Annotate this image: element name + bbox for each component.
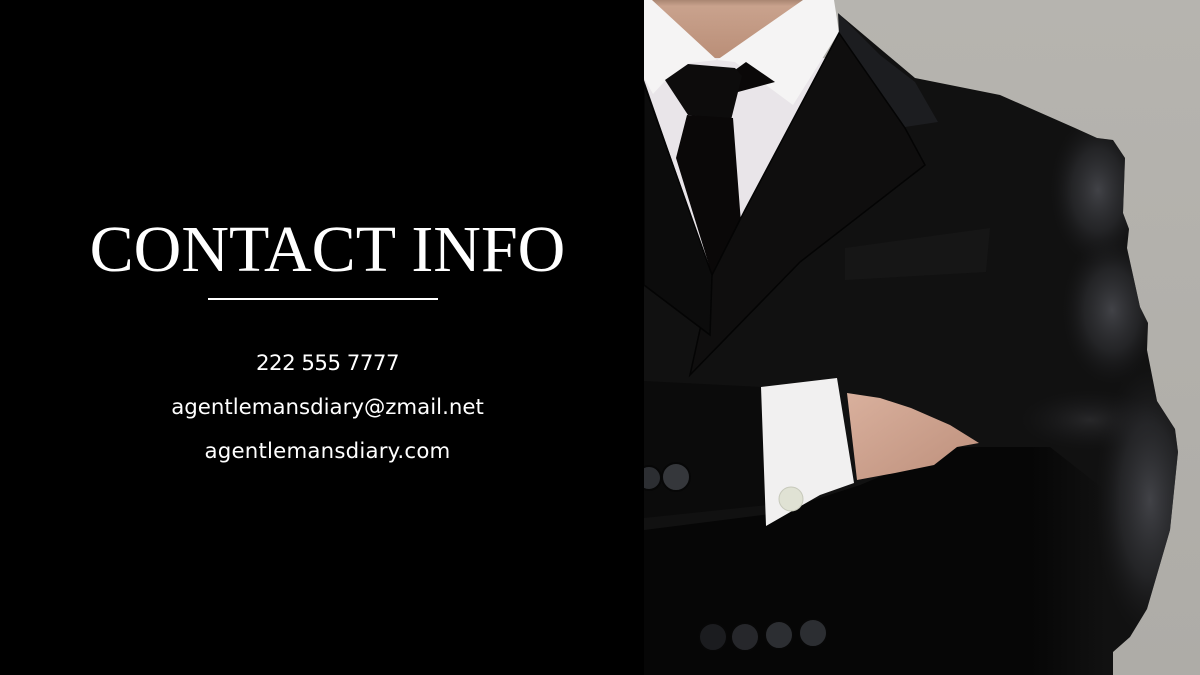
shirt collar [644,0,839,105]
right lapel [690,33,925,375]
left lapel [644,84,712,335]
cuff button [779,487,803,511]
phone number: 222 555 7777 [256,351,399,376]
jacket sleeve highlights [644,115,1200,675]
shirt cuff [761,378,854,526]
sleeve buttons [637,463,827,651]
left forearm sleeve [644,381,768,518]
photo: man in black suit with crossed arms [644,0,1200,675]
backdrop [644,0,1200,675]
email address: agentlemansdiary@zmail.net [171,395,484,420]
hand [847,393,979,480]
jacket body [644,14,1178,675]
title underline [208,298,438,300]
right upper collar [838,13,938,127]
neck [644,0,810,62]
title: CONTACT INFO [90,213,565,286]
website: agentlemansdiary.com [204,439,450,464]
tie [665,62,775,275]
shirt front [644,58,840,285]
chest pocket [845,228,990,280]
panel: contact info [0,0,644,675]
